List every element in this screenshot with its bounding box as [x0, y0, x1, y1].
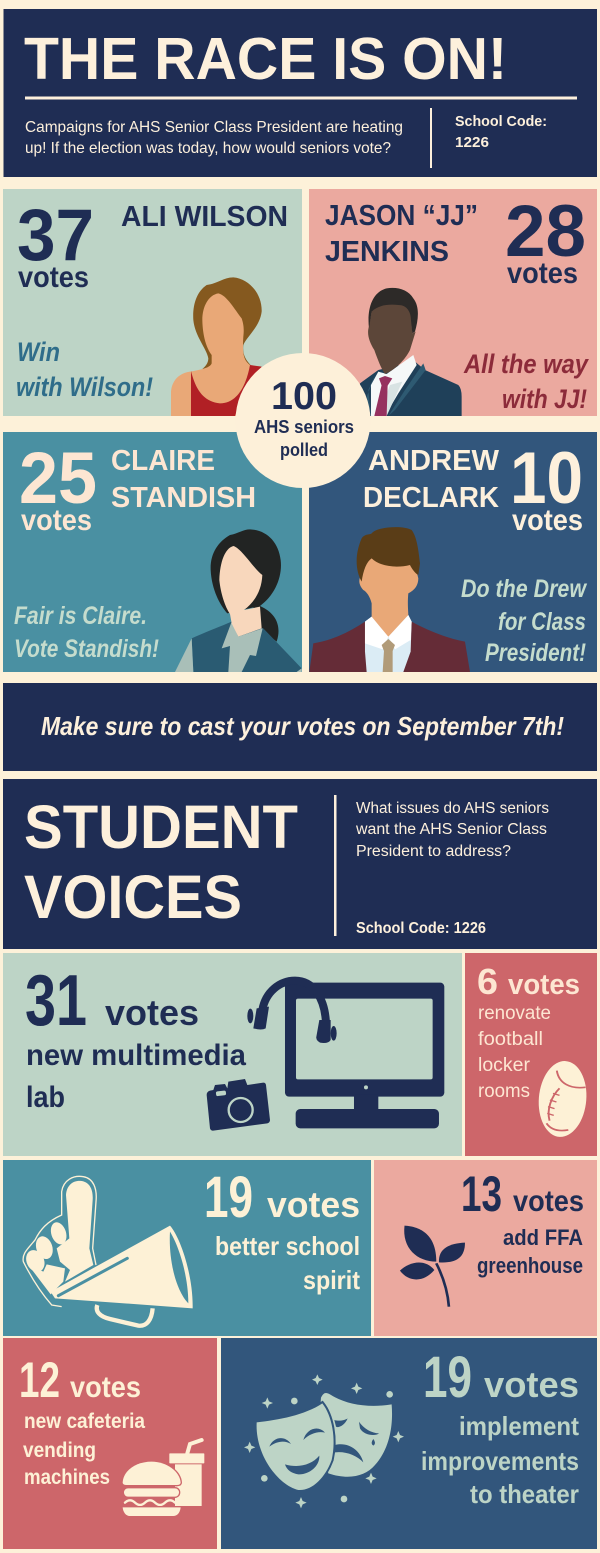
icon: foam finger and megaphone: [23, 1176, 193, 1326]
panel: header: [4, 9, 597, 177]
vote count: votes: [508, 969, 580, 1001]
icon: theater masks: [244, 1374, 404, 1508]
vote count: 28: [505, 191, 586, 272]
candidate name: ALI WILSON: [121, 201, 288, 233]
vote count: 10: [510, 438, 583, 519]
issue text: football: [478, 1029, 543, 1050]
issue text: vending: [23, 1439, 96, 1462]
icon: computer, headphones, camera: [207, 981, 444, 1131]
issue text: greenhouse: [477, 1253, 583, 1278]
portrait: Ali: [171, 277, 262, 416]
vote count: 19: [204, 1165, 253, 1230]
intro text: up! If the election was today, how would seniors vote?: [25, 140, 391, 157]
school code: [455, 113, 547, 151]
vote count: 37: [17, 195, 94, 276]
callout: 100 seniors polled: 100: [271, 375, 337, 418]
callout: 100 seniors polled: [236, 353, 370, 488]
vote count: votes: [513, 1185, 584, 1218]
slogan: [16, 337, 153, 402]
question text: President to address?: [356, 843, 511, 860]
portrait: Jason: [360, 288, 462, 416]
issue text: lab: [26, 1081, 65, 1114]
issue text: rooms: [478, 1081, 530, 1102]
callout: 100 seniors polled: AHS seniors: [254, 417, 354, 437]
panel: football locker rooms: [465, 953, 597, 1156]
panel: theater improvements: [221, 1338, 597, 1549]
slogan: with JJ!: [502, 384, 587, 414]
candidate name: JENKINS: [325, 236, 449, 268]
slogan: [461, 575, 587, 667]
issue text: improvements: [421, 1446, 579, 1476]
issue text: locker: [478, 1055, 531, 1076]
banner: voting date: [3, 683, 597, 771]
slogan: [463, 349, 590, 414]
vote count: votes: [507, 257, 578, 290]
intro text: Campaigns for AHS Senior Class President are heating: [25, 119, 403, 136]
vote count: [477, 961, 580, 1002]
candidate name: ANDREW: [368, 445, 500, 477]
vote count: votes: [105, 992, 199, 1033]
candidate name: STANDISH: [111, 482, 256, 514]
question text: want the AHS Senior Class: [355, 821, 547, 838]
vote count: 12: [19, 1352, 60, 1408]
issue text: [477, 1225, 583, 1278]
candidate name: DECLARK: [363, 482, 499, 514]
candidate name: [111, 445, 256, 514]
vote count: votes: [21, 504, 92, 537]
issue text: add FFA: [503, 1225, 583, 1250]
issue text: [421, 1411, 579, 1509]
issue text: implement: [459, 1411, 579, 1441]
issue text: machines: [24, 1466, 110, 1489]
panel: school spirit: [3, 1160, 371, 1336]
heading: [24, 793, 298, 931]
vote count: 31: [25, 961, 87, 1041]
candidate name: [325, 200, 478, 268]
question text: [355, 800, 549, 860]
icon: football: [536, 1060, 589, 1138]
issue text: better school: [215, 1231, 360, 1261]
vote count: votes: [267, 1184, 360, 1225]
icon: plant: [400, 1226, 465, 1307]
panel: Andrew Declark: [309, 432, 597, 672]
issue text: new cafeteria: [24, 1410, 145, 1433]
portrait: Claire: [175, 529, 302, 672]
slogan: Fair is Claire.: [14, 602, 147, 630]
issue text: [478, 1003, 551, 1102]
school code: School Code:: [455, 113, 547, 130]
slogan: [14, 602, 159, 663]
vote count: votes: [18, 261, 89, 294]
title: THE RACE IS ON!: [24, 26, 507, 92]
issue text: new multimedia: [26, 1039, 246, 1072]
panel: Student Voices header: [3, 779, 597, 949]
vote count: [423, 1345, 579, 1410]
school code: School Code: 1226: [356, 920, 486, 937]
vote count: votes: [512, 504, 583, 537]
panel: FFA greenhouse: [374, 1160, 597, 1336]
panel: multimedia lab: [3, 953, 462, 1156]
panel: Jason Jenkins: [309, 189, 597, 416]
issue text: renovate: [478, 1003, 551, 1024]
slogan: with Wilson!: [16, 372, 153, 402]
candidate name: CLAIRE: [111, 445, 215, 477]
slogan: Win: [17, 337, 60, 367]
icon: burger and drink: [123, 1440, 204, 1516]
portrait: Andrew: [309, 527, 470, 672]
vote count: 19: [423, 1345, 472, 1410]
vote count: [461, 1166, 584, 1222]
school code: 1226: [455, 134, 489, 151]
vote count: 13: [461, 1166, 502, 1222]
issue text: spirit: [303, 1265, 360, 1295]
panel: Claire Standish: [3, 432, 302, 672]
panel: vending machines: [3, 1338, 217, 1549]
slogan: Vote Standish!: [14, 635, 159, 663]
issue text: [23, 1410, 145, 1489]
vote count: [204, 1165, 360, 1230]
vote count: votes: [70, 1371, 141, 1404]
heading: STUDENT: [24, 793, 298, 861]
vote count: [25, 961, 199, 1041]
candidate name: JASON “JJ”: [325, 200, 478, 232]
vote count: votes: [484, 1364, 579, 1405]
candidate name: [363, 445, 500, 514]
issue text: to theater: [470, 1479, 579, 1509]
issue text: [215, 1231, 360, 1295]
heading: VOICES: [24, 863, 242, 931]
vote count: 6: [477, 961, 498, 1002]
callout: 100 seniors polled: polled: [280, 440, 328, 460]
issue text: [26, 1039, 246, 1114]
vote count: [19, 1352, 141, 1408]
intro text: [25, 119, 403, 157]
question text: What issues do AHS seniors: [356, 800, 549, 817]
vote count: 25: [19, 438, 97, 519]
panel: Ali Wilson: [3, 189, 302, 416]
